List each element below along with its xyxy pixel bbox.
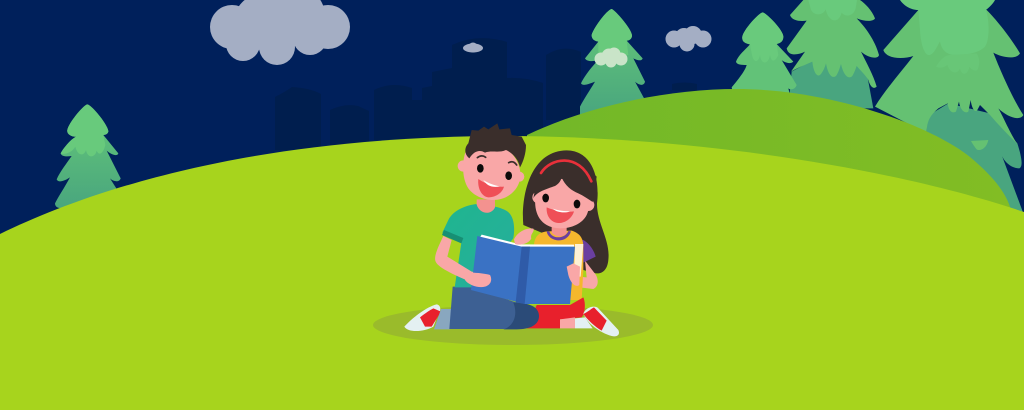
girl shoe (583, 307, 619, 336)
girl sock (575, 317, 593, 328)
hill: back (527, 89, 1012, 214)
girl hand on book (567, 263, 580, 286)
girl headband (541, 161, 591, 181)
tree: far left (55, 104, 121, 208)
boy teeth (483, 180, 500, 187)
boy hair (465, 123, 526, 167)
boy shoe (404, 304, 441, 331)
boy hand on shoulder (514, 228, 534, 245)
boy jeans knee (503, 303, 539, 329)
girl fringe (533, 155, 597, 202)
girl teeth (553, 209, 570, 212)
boy mouth (478, 179, 504, 197)
girl face (532, 179, 594, 228)
tree: small right (732, 12, 797, 95)
boy neck (477, 199, 495, 213)
cloud: tiny grey (463, 42, 483, 52)
cloud: large grey (210, 0, 350, 65)
book spine (516, 247, 530, 304)
boy face (458, 143, 524, 200)
girl hair back (523, 150, 609, 273)
boy hand on book (465, 273, 491, 287)
boy shirt (442, 204, 514, 287)
girl leg (560, 317, 575, 328)
boy arm (435, 236, 491, 286)
girl shorts (527, 297, 585, 328)
tree: large right centre (787, 0, 879, 108)
boy sock (434, 309, 453, 329)
girl mouth (547, 207, 574, 223)
city skyline silhouette (275, 38, 697, 150)
cloud: small grey right (666, 26, 712, 52)
girl arm (573, 261, 598, 289)
book (471, 235, 575, 304)
girl eyes (542, 194, 580, 208)
hill: front (0, 136, 1024, 410)
ground shadow (373, 305, 653, 345)
tree: largest far right (875, 0, 1024, 215)
tree: behind hill centre (580, 9, 645, 115)
cloud: pale over tree (594, 48, 628, 68)
boy sleeve cuff (442, 230, 463, 243)
boy eyes (477, 164, 512, 180)
girl neck (552, 225, 567, 236)
boy eyebrows (477, 156, 517, 165)
girl (523, 150, 619, 336)
girl dress (534, 231, 596, 300)
boy jeans (449, 287, 538, 329)
boy (404, 123, 539, 331)
children group (404, 123, 619, 336)
